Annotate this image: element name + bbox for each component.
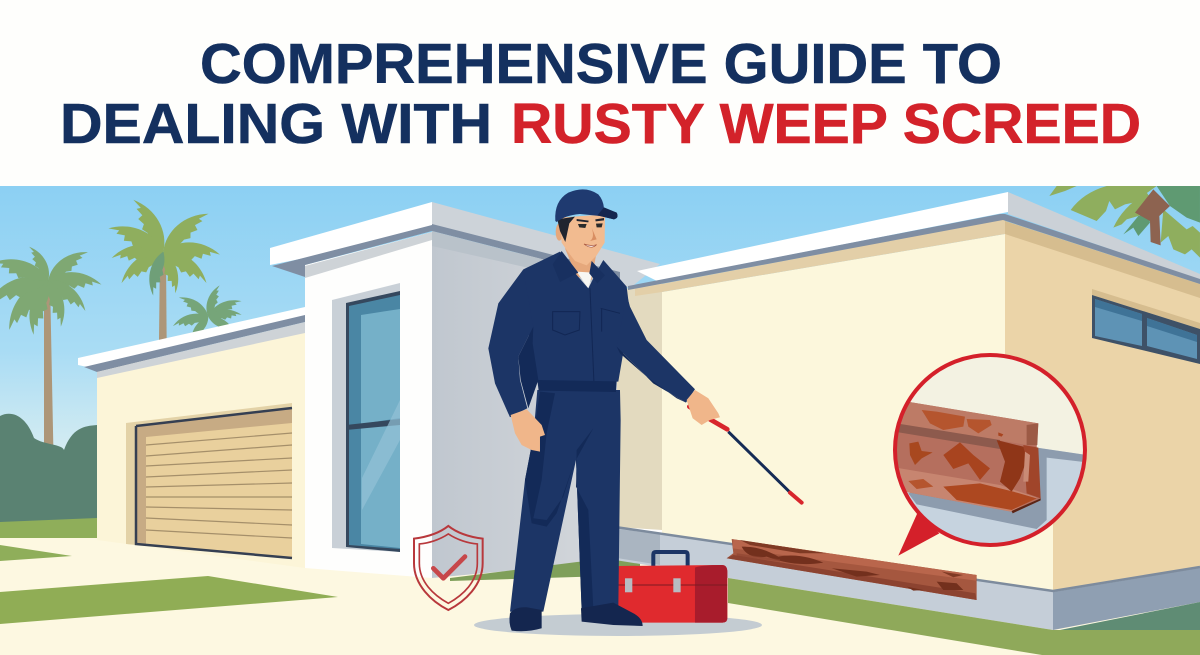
ground shadow under man: [474, 614, 762, 636]
magnified base: [907, 448, 1082, 543]
tower roof top side: [432, 202, 660, 288]
tall window: [332, 283, 400, 552]
pants: [510, 390, 621, 612]
lawn far dark: [1060, 602, 1200, 630]
rust blotches: [922, 410, 992, 433]
rail dark edge: [1012, 498, 1041, 513]
arm right: [617, 284, 695, 403]
right building: [615, 192, 1200, 655]
hand right: [687, 390, 720, 425]
neck: [565, 248, 597, 280]
eave tan side: [1005, 221, 1200, 298]
right wall corner face: [1005, 221, 1200, 592]
toolbox body: [614, 565, 727, 623]
nose and cheek shade: [590, 228, 597, 241]
roof trim: [628, 214, 1200, 290]
rail lower flange: [890, 467, 1037, 512]
palm tree small: [171, 283, 243, 348]
eave tan front: [635, 219, 1005, 296]
tower roof trim side: [432, 224, 620, 279]
tower roof trim front: [272, 225, 432, 277]
belt: [537, 380, 617, 392]
palm tree middle: [106, 194, 220, 340]
hand left: [511, 409, 545, 452]
arm left: [488, 269, 533, 417]
toolbox latches: [625, 578, 632, 592]
undershirt: [577, 272, 593, 288]
magnifier background: [895, 355, 1085, 545]
grass strip left: [0, 518, 97, 541]
lawn right: [728, 578, 1200, 655]
shield check icon: [414, 526, 483, 610]
hair: [557, 217, 575, 242]
ground: [0, 538, 1200, 655]
sky: [0, 186, 1200, 486]
magnified rusty rail: [890, 398, 1041, 512]
pointer tool: [689, 407, 802, 503]
lawn wedge large: [0, 576, 338, 624]
weep screed rail on wall: [727, 539, 977, 600]
title: COMPREHENSIVE GUIDE TO: [200, 32, 1002, 96]
roof white: [637, 192, 1008, 281]
red toolbox: [614, 552, 727, 623]
high window: [1092, 289, 1200, 364]
right wall side beige: [617, 282, 662, 530]
palm tree top right: [1049, 186, 1200, 258]
central white tower: [270, 202, 660, 578]
toolbox handle: [653, 552, 688, 567]
ear: [556, 223, 563, 241]
green strip behind man: [450, 556, 640, 581]
base shadow left: [617, 529, 660, 565]
technician: [488, 189, 802, 631]
garage roof: [78, 307, 305, 368]
jacket details: [553, 288, 620, 383]
face: [560, 214, 605, 265]
jacket: [520, 252, 630, 382]
cap visor: [597, 207, 618, 219]
lawn wedge small: [0, 545, 72, 561]
bushes: [0, 414, 97, 522]
garage building: [78, 307, 305, 568]
mouth: [584, 244, 597, 247]
eyes: [578, 223, 603, 228]
title: RUSTY WEEP SCREED: [511, 92, 1141, 156]
garage door: [126, 403, 292, 559]
magnifier pointer: [898, 511, 939, 556]
base side: [1053, 568, 1200, 630]
palm tree left: [0, 243, 102, 447]
brows: [577, 218, 604, 222]
magnifier callout: [890, 355, 1087, 558]
cap: [555, 189, 618, 222]
roof top grey side: [1008, 192, 1200, 280]
head: [553, 189, 618, 283]
garage wall: [97, 330, 305, 568]
title: DEALING WITH: [60, 92, 492, 156]
title: [60, 32, 1141, 156]
title banner background: [0, 0, 1200, 186]
rail top flange: [901, 402, 1038, 445]
collar: [553, 251, 605, 283]
rail groove: [898, 424, 1000, 449]
right wall front: [662, 234, 1053, 592]
tower side wall grey: [432, 235, 625, 578]
shoes: [509, 607, 542, 631]
base front: [615, 527, 1053, 630]
magnifier ring: [895, 355, 1085, 545]
tower front white: [305, 232, 432, 578]
tower roof white: [270, 202, 432, 265]
